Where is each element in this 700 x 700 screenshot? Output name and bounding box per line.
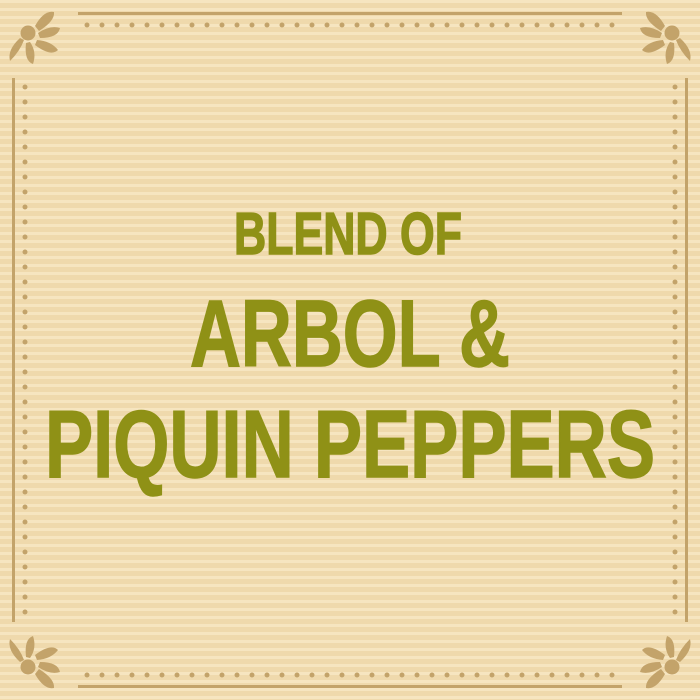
line: blend of: BLEND OF xyxy=(234,201,462,267)
ornament: bottom-right xyxy=(640,636,691,688)
ornament: bottom-left xyxy=(9,636,60,688)
title text xyxy=(45,201,655,498)
line: arbol &: ARBOL & xyxy=(190,281,510,387)
ornament: top-left xyxy=(9,12,60,64)
ornament: top-right xyxy=(640,12,691,64)
